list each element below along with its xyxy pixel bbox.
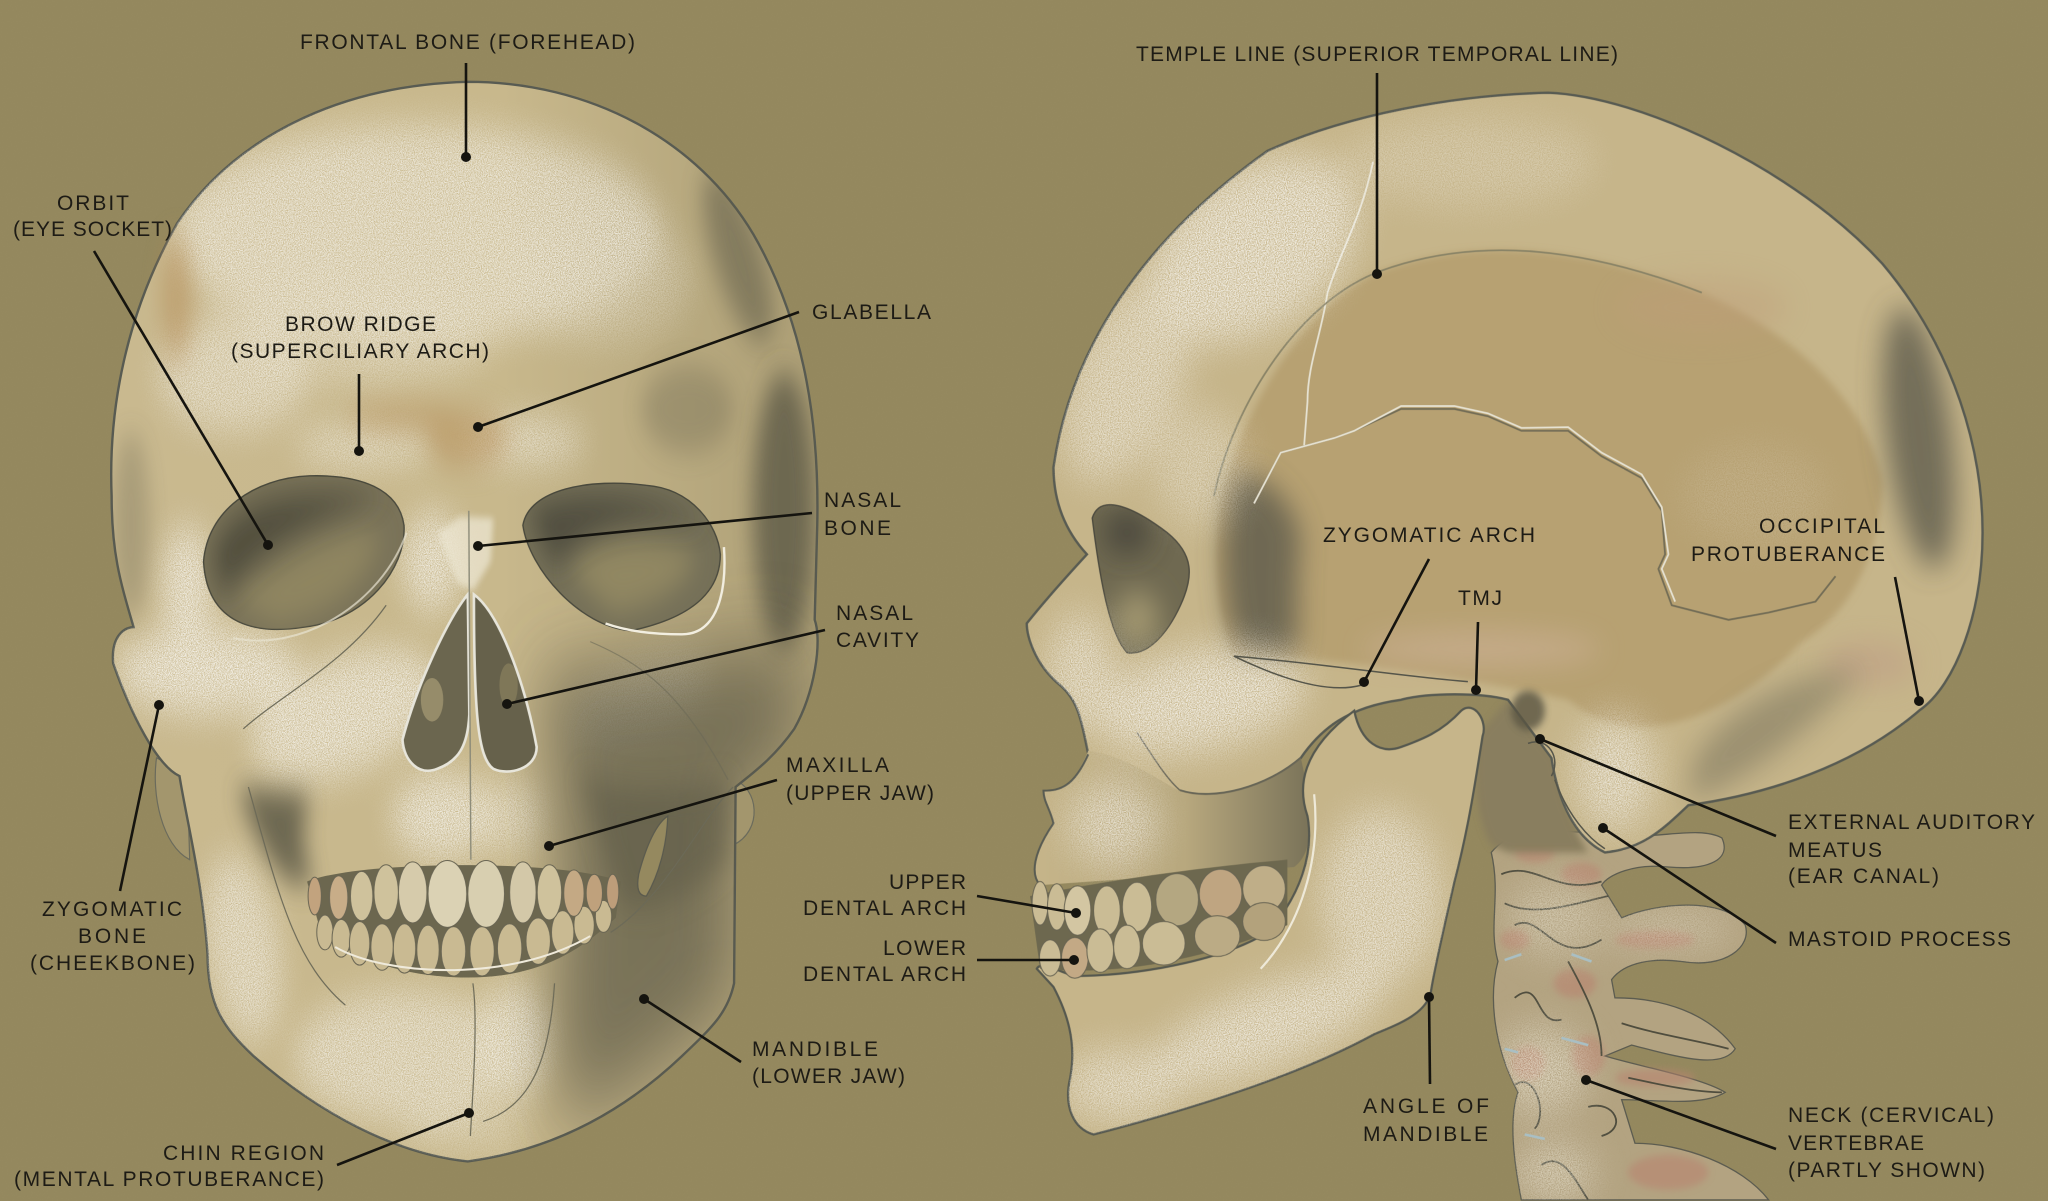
jaw window at right xyxy=(638,816,668,896)
label: brow ridge: (SUPERCILIARY ARCH) xyxy=(231,340,489,363)
label: external auditory meatus: (EAR CANAL) xyxy=(1788,865,1939,888)
ear canal and structural contours xyxy=(1234,656,1605,969)
leader: mastoid process xyxy=(1598,823,1776,943)
label: angle of mandible: ANGLE OF xyxy=(1363,1095,1489,1118)
label: frontal bone: FRONTAL BONE (FOREHEAD) xyxy=(300,31,635,54)
label: nasal bone: NASAL xyxy=(824,489,901,512)
label: lower dental arch xyxy=(803,937,966,986)
label: nasal cavity xyxy=(836,602,919,652)
leader: frontal bone xyxy=(461,63,471,162)
leader: zygomatic bone xyxy=(120,700,164,891)
suture lines and temple line xyxy=(1214,162,1836,620)
label: zygomatic bone xyxy=(30,898,195,975)
leader: temple line xyxy=(1372,73,1382,279)
label: occipital protuberance xyxy=(1691,515,1885,566)
lower ear-side bulges xyxy=(155,758,754,860)
label: upper dental arch: DENTAL ARCH xyxy=(803,897,966,920)
label: upper dental arch xyxy=(803,871,966,920)
leader: nasal cavity xyxy=(502,630,825,709)
label: brow ridge xyxy=(231,313,489,363)
label: orbit: (EYE SOCKET) xyxy=(13,218,172,241)
side shadows xyxy=(1224,304,1968,802)
label: angle of mandible xyxy=(1363,1095,1489,1146)
leader: glabella xyxy=(473,312,799,432)
label: lower dental arch: DENTAL ARCH xyxy=(803,963,966,986)
leader: nasal bone xyxy=(473,513,812,551)
skull silhouette xyxy=(111,82,818,1161)
orbit: viewer left xyxy=(203,476,407,641)
soft shadows xyxy=(113,157,815,1129)
label: external auditory meatus xyxy=(1788,811,2035,888)
leader: brow ridge xyxy=(354,374,364,456)
nasal bone xyxy=(437,517,493,591)
label: maxilla: (UPPER JAW) xyxy=(786,782,934,805)
leader: maxilla xyxy=(544,780,777,851)
leader: chin xyxy=(337,1108,474,1165)
maxilla with shaded cheek hollow xyxy=(1035,732,1310,885)
label: maxilla: MAXILLA xyxy=(786,754,889,777)
teeth xyxy=(307,860,621,977)
label: nasal bone xyxy=(824,489,901,540)
label: mandible xyxy=(752,1038,905,1088)
leader: upper dental arch xyxy=(977,896,1081,918)
side chalk highlights xyxy=(1036,118,1829,1121)
label: temple line: TEMPLE LINE (SUPERIOR TEMPORAL LINE) xyxy=(1136,43,1618,66)
chin midline and muzzle contours xyxy=(243,605,733,1136)
nasal cavity xyxy=(402,511,537,860)
illustration: side view skull with neck xyxy=(1027,93,1983,1201)
label: zygomatic bone: BONE xyxy=(78,925,146,948)
label: mandible: MANDIBLE xyxy=(752,1038,878,1061)
label: chin region: CHIN REGION xyxy=(163,1142,324,1165)
label: nasal bone: BONE xyxy=(824,517,891,540)
label: nasal cavity: CAVITY xyxy=(836,629,919,652)
label: upper dental arch: UPPER xyxy=(889,871,966,894)
label: nasal cavity: NASAL xyxy=(836,602,913,625)
label: angle of mandible: MANDIBLE xyxy=(1363,1123,1488,1146)
label: cervical vertebrae: NECK (CERVICAL) xyxy=(1788,1104,1994,1127)
label: TMJ: TMJ xyxy=(1458,587,1502,610)
label: cervical vertebrae xyxy=(1788,1104,1994,1182)
label: zygomatic arch: ZYGOMATIC ARCH xyxy=(1323,524,1535,547)
mandible xyxy=(1037,708,1484,1135)
leader: angle of mandible xyxy=(1424,992,1434,1084)
orbit xyxy=(1092,505,1189,653)
label: cervical vertebrae: VERTEBRAE xyxy=(1788,1132,1924,1155)
tissue shadow behind ear and under skull base xyxy=(1476,700,1588,852)
illustration: front view skull xyxy=(111,82,818,1161)
label: glabella: GLABELLA xyxy=(812,301,931,324)
cervical vertebrae xyxy=(1491,831,1769,1201)
leader: lower dental arch xyxy=(977,955,1079,965)
leader: cervical vertebrae xyxy=(1581,1075,1776,1149)
cranium and face silhouette xyxy=(1027,93,1983,852)
label: external auditory meatus: MEATUS xyxy=(1788,839,1882,862)
label: cervical vertebrae: (PARTLY SHOWN) xyxy=(1788,1159,1985,1182)
leader: zygomatic arch xyxy=(1359,559,1429,687)
label: mandible: (LOWER JAW) xyxy=(752,1065,905,1088)
leader: mandible xyxy=(639,994,741,1062)
label: orbit: ORBIT xyxy=(57,192,129,215)
label: lower dental arch: LOWER xyxy=(883,937,966,960)
label: orbit xyxy=(13,192,172,241)
label: external auditory meatus: EXTERNAL AUDITORY xyxy=(1788,811,2035,834)
leader: external auditory meatus xyxy=(1535,734,1776,836)
leader: TMJ xyxy=(1471,622,1481,695)
label: brow ridge: BROW RIDGE xyxy=(285,313,436,336)
leader: orbit xyxy=(94,251,273,550)
label: chin region: (MENTAL PROTUBERANCE) xyxy=(14,1168,324,1191)
warm tint on brow xyxy=(162,234,509,467)
label: zygomatic bone: ZYGOMATIC xyxy=(42,898,182,921)
label: mastoid process: MASTOID PROCESS xyxy=(1788,928,2011,951)
label: zygomatic bone: (CHEEKBONE) xyxy=(30,952,195,975)
chalk highlights xyxy=(116,125,717,1146)
label: chin region xyxy=(14,1142,324,1191)
orbit: viewer right xyxy=(523,483,724,634)
label: occipital protuberance: OCCIPITAL xyxy=(1759,515,1885,538)
leader: occipital protuberance xyxy=(1895,577,1924,706)
label: maxilla xyxy=(786,754,934,805)
temporal region tint xyxy=(1217,250,1916,727)
label: occipital protuberance: PROTUBERANCE xyxy=(1691,543,1885,566)
side teeth xyxy=(1030,860,1287,978)
